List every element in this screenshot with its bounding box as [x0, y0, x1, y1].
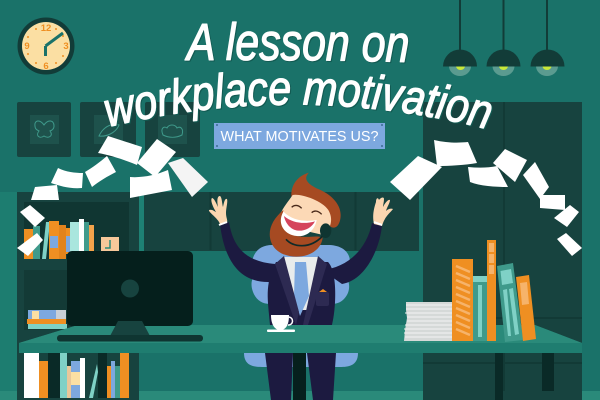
- upper wall cabinet: [144, 192, 419, 251]
- small desk clock on shelf: [101, 237, 119, 252]
- pendant lamps: [443, 0, 564, 76]
- head: [270, 173, 341, 257]
- subtitle banner: [214, 123, 385, 149]
- chair stem: [293, 353, 306, 400]
- subtitle banner: WHAT MOTIVATES US?: [220, 129, 378, 145]
- left bookcase: [0, 192, 144, 400]
- framed picture: crown: [145, 102, 200, 157]
- lapels: [275, 256, 299, 325]
- right tall cabinet: [423, 102, 582, 400]
- shirt: [284, 257, 318, 310]
- right hand: [373, 197, 393, 226]
- wall clock: 9: [24, 41, 30, 52]
- title line 1: A lesson on: [184, 21, 409, 64]
- face: [280, 195, 331, 235]
- trousers: [265, 353, 336, 400]
- standing books: [452, 240, 536, 342]
- desk top: [19, 325, 582, 353]
- eyes: [292, 205, 322, 214]
- floor strip: [0, 391, 600, 400]
- wall clock: 6: [43, 61, 49, 72]
- title: [104, 21, 492, 130]
- flying papers right: [390, 140, 582, 256]
- mouth: [281, 212, 317, 236]
- framed picture: flower: [17, 102, 71, 157]
- left arm: [220, 222, 290, 285]
- desk surface highlight: [19, 325, 582, 343]
- pocket: [316, 289, 329, 306]
- left hand: [209, 196, 227, 224]
- computer monitor: [57, 251, 203, 342]
- framed picture: leaf: [80, 102, 136, 157]
- beard: [270, 210, 323, 257]
- man: [209, 173, 393, 400]
- office chair: [244, 245, 358, 367]
- tongue: [284, 216, 315, 231]
- flying papers left: [17, 136, 208, 256]
- right arm: [322, 223, 382, 284]
- paper stack: [404, 302, 452, 341]
- suit jacket: [268, 262, 335, 325]
- wall clock: 3: [63, 41, 69, 52]
- title line 2: workplace motivation: [104, 72, 492, 130]
- headset: [286, 223, 331, 246]
- wall clock: 12: [41, 23, 51, 34]
- desk legs: [495, 353, 554, 400]
- wall clock: [18, 18, 74, 74]
- coffee cup: [267, 315, 295, 332]
- hair: [291, 173, 341, 228]
- lower shelf under desk: [17, 353, 139, 400]
- books on the upper shelf: [24, 219, 94, 259]
- necktie: [294, 262, 309, 316]
- shirt cuffs: [219, 222, 382, 225]
- stack of books on lower shelf: [27, 310, 67, 329]
